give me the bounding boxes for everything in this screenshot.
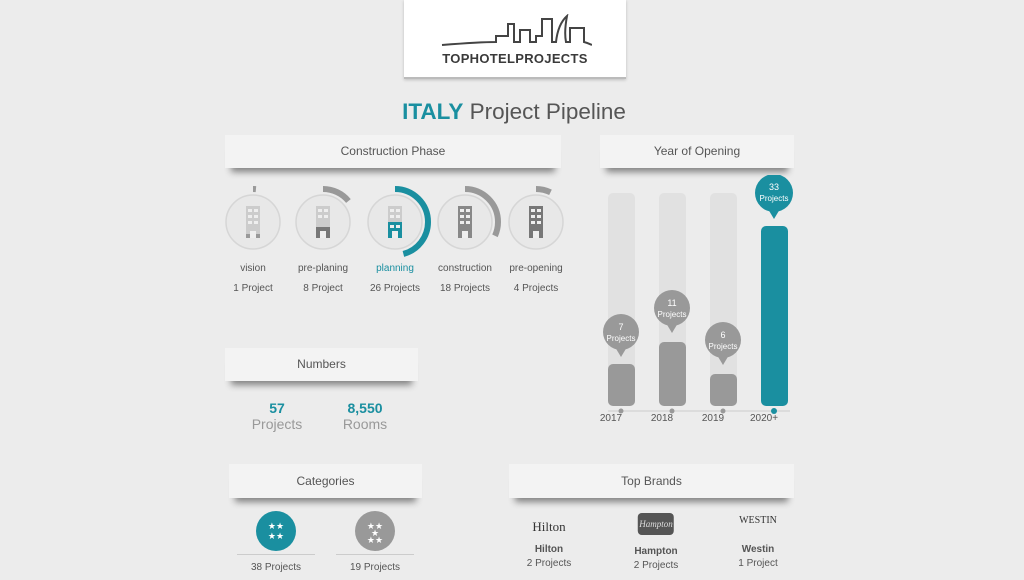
numbers: rooms: [343, 400, 387, 432]
panel: construction phase circles: 8 Project: [303, 283, 343, 294]
category: 5 stars: ★★: [367, 535, 383, 545]
brand: westin: Westin: [742, 544, 774, 555]
panel: construction phase circles: construction: [438, 263, 492, 274]
icon: skyline: [442, 14, 592, 46]
panel: construction phase circles: 1 Project: [233, 283, 273, 294]
brand: hilton: Hilton: [535, 544, 563, 555]
brand: hilton: 2 Projects: [527, 558, 571, 569]
bar chart: year of opening: [600, 175, 793, 424]
brand: hilton: [527, 519, 571, 569]
logo text: TOPHOTELPROJECTS: [442, 51, 588, 66]
header: construction phase: [225, 135, 561, 168]
category: 4 stars: ★★: [268, 531, 284, 541]
category: 5 stars: [336, 511, 414, 573]
panel: construction phase circles: [225, 186, 564, 294]
header: numbers: Numbers: [297, 357, 346, 371]
bar chart: year of opening: Projects: [760, 194, 788, 203]
bar chart: year of opening: Projects: [607, 334, 635, 343]
bar chart: year of opening: 2020+: [750, 413, 778, 424]
panel: construction phase circles: pre-opening: [509, 263, 563, 274]
header: top brands: [509, 464, 794, 498]
brand: hampton: Hampton: [634, 546, 678, 557]
labels: vision: [240, 263, 266, 274]
category: 5 stars: ★: [371, 528, 379, 538]
numbers: projects: [252, 400, 302, 432]
bar chart: year of opening: Projects: [658, 310, 686, 319]
header: categories: [229, 464, 422, 498]
panel: construction phase circles: planning: [376, 263, 414, 274]
numbers: projects: Projects: [252, 416, 302, 432]
category: 4 stars: ★★: [268, 521, 284, 531]
header: year of opening: Year of Opening: [654, 144, 740, 158]
category: 5 stars: ★★: [367, 521, 383, 531]
brand: hilton: Hilton: [532, 519, 566, 534]
category: 5 stars: 19 Projects: [350, 562, 400, 573]
bar chart: year of opening: 2019: [702, 413, 725, 424]
panel: construction phase circles: 26 Projects: [370, 283, 420, 294]
bar chart: year of opening: 11: [667, 298, 677, 308]
brand: hampton: 2 Projects: [634, 560, 678, 571]
category: 4 stars: 38 Projects: [251, 562, 301, 573]
brand: hampton: [634, 513, 678, 571]
brand: westin: WESTIN: [739, 515, 777, 526]
numbers: rooms: 8,550: [347, 400, 383, 416]
brand: westin: 1 Project: [738, 558, 778, 569]
brand: westin: [738, 515, 778, 569]
numbers: projects: 57: [269, 400, 285, 416]
brand: hampton: Hampton: [639, 519, 673, 529]
header: year of opening: [600, 135, 794, 168]
panel: construction phase circles: 18 Projects: [440, 283, 490, 294]
title: ITALY Project Pipeline: [402, 99, 626, 124]
category: 4 stars: [237, 511, 315, 573]
header: construction phase: Construction Phase: [341, 144, 445, 158]
bar chart: year of opening: 2017: [600, 413, 623, 424]
bar chart: year of opening: 33: [769, 182, 779, 192]
bar chart: year of opening: Projects: [709, 342, 737, 351]
header: categories: Categories: [296, 474, 355, 488]
bar chart: year of opening: 2018: [651, 413, 674, 424]
panel: construction phase circles: pre-planing: [298, 263, 348, 274]
header: numbers: [225, 348, 418, 381]
header: top brands: Top Brands: [621, 474, 682, 488]
bar chart: year of opening: 6: [720, 330, 726, 340]
panel: construction phase circles: 4 Projects: [514, 283, 558, 294]
logo box: [404, 0, 626, 79]
numbers: rooms: Rooms: [343, 416, 387, 432]
bar chart: year of opening: 7: [618, 322, 624, 332]
